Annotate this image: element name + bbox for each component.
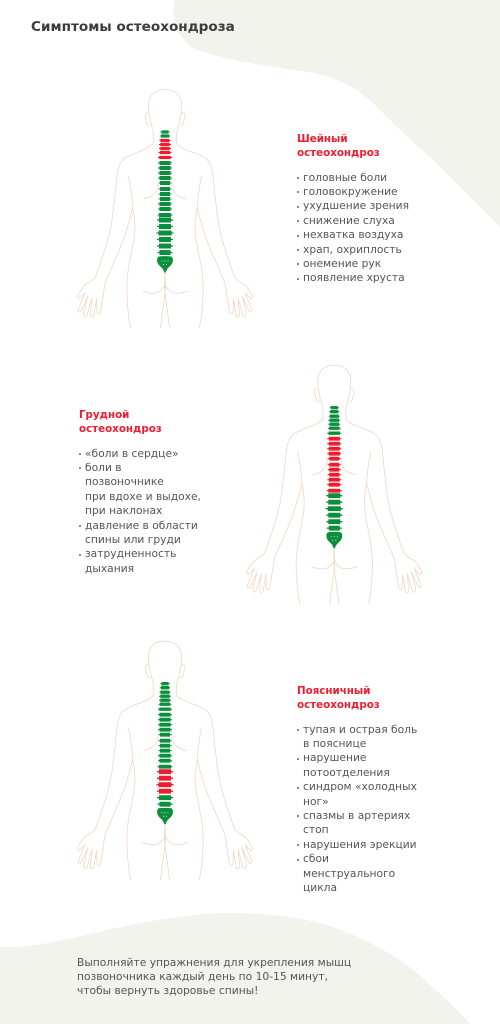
heading: lumbar: остеохондроз [297, 699, 380, 711]
background blob: top right [173, 0, 500, 227]
symptom list: thoracic: «боли в сердце» [85, 446, 179, 460]
symptom list: lumbar: тупая и острая боль [303, 722, 417, 736]
closing advice text: позвоночника каждый день по 10-15 минут, [77, 970, 328, 983]
heading: cervical [297, 133, 380, 159]
heading: thoracic [79, 409, 162, 435]
heading: cervical: Шейный [297, 133, 348, 145]
closing advice text: Выполняйте упражнения для укрепления мышц [77, 956, 351, 968]
symptom list: cervical: ухудшение зрения [303, 199, 409, 212]
symptom list: lumbar: спазмы в артериях [303, 809, 410, 822]
symptom list: thoracic: при наклонах [85, 504, 162, 517]
symptom list: lumbar: синдром «холодных [303, 780, 417, 793]
symptom list: thoracic: затрудненность [85, 547, 176, 560]
figure: lumbar osteochondrosis [77, 641, 253, 880]
symptom list: thoracic: давление в области [85, 519, 198, 532]
background blob: bottom [0, 913, 470, 1024]
symptom list: thoracic: дыхания [85, 562, 134, 575]
symptom list: lumbar: стоп [303, 823, 329, 836]
heading: lumbar: Поясничный [297, 685, 370, 697]
heading: thoracic: Грудной [79, 409, 129, 421]
symptom list: lumbar [297, 722, 417, 894]
symptom list: cervical: появление хруста [303, 271, 405, 284]
symptom list: lumbar: цикла [303, 881, 337, 894]
symptom list: thoracic: боли в [85, 461, 122, 474]
symptom list: lumbar: нарушение [303, 751, 367, 764]
symptom list: cervical [297, 170, 409, 284]
symptom list: lumbar: в пояснице [303, 737, 366, 750]
symptom list: cervical: храп, охриплость [303, 243, 402, 256]
symptom list: thoracic: при вдохе и выдохе, [85, 490, 201, 503]
symptom list: cervical: снижение слуха [303, 214, 395, 227]
heading: lumbar [297, 685, 380, 711]
symptom list: lumbar: нарушения эрекции [303, 838, 417, 851]
symptom list: lumbar: потоотделения [303, 766, 390, 779]
heading: thoracic: остеохондроз [79, 423, 162, 435]
symptom list: cervical: онемение рук [303, 257, 381, 270]
figure: thoracic osteochondrosis [247, 365, 422, 604]
figure: cervical osteochondrosis [77, 90, 253, 328]
closing advice text: чтобы вернуть здоровье спины! [77, 984, 258, 997]
symptom list: cervical: головокружение [303, 185, 398, 198]
symptom list: cervical: нехватка воздуха [303, 228, 403, 241]
closing advice text [77, 956, 351, 997]
symptom list: lumbar: менструального [303, 867, 395, 880]
symptom list: lumbar: ног» [303, 795, 329, 808]
symptom list: thoracic: спины или груди [85, 533, 181, 546]
symptom list: thoracic: позвоночнике [85, 475, 164, 488]
symptom list: thoracic [79, 446, 201, 575]
title: Симптомы остеохондроза [31, 19, 235, 35]
symptom list: cervical: головные боли [303, 170, 387, 184]
symptom list: lumbar: сбои [303, 852, 329, 865]
heading: cervical: остеохондроз [297, 147, 380, 159]
